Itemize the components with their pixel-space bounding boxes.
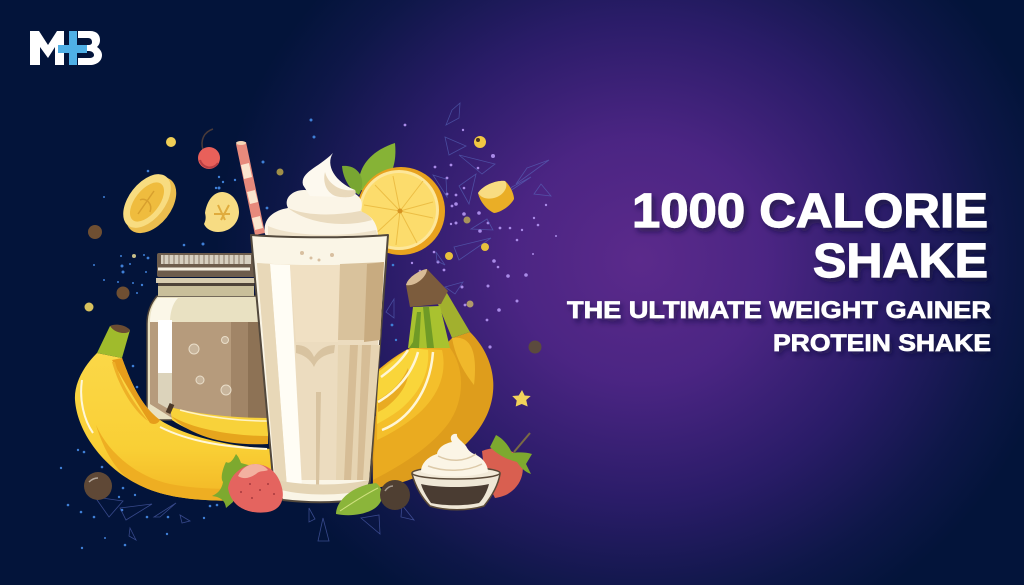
subtitle: THE ULTIMATE WEIGHT GAINER: [567, 297, 991, 324]
bananas right bunch: [372, 269, 493, 488]
banana slice middle: [204, 192, 239, 232]
banana piece right: [478, 181, 514, 213]
subtitle: [567, 297, 991, 357]
bubbles in jar: [189, 336, 231, 395]
heading: [632, 185, 988, 288]
heading: 1000 CALORIE: [632, 185, 988, 238]
strawberry right: [482, 433, 532, 498]
jar: [147, 253, 267, 420]
chocolate ball right: [380, 480, 410, 510]
whipped cream: [265, 153, 378, 240]
particles: constellation triangles: [95, 103, 551, 541]
leaf bottom: [336, 483, 382, 515]
banana slice left: [114, 165, 186, 243]
milkshake glass: [251, 235, 388, 502]
subtitle: PROTEIN SHAKE: [773, 330, 991, 357]
jar lid: [156, 253, 256, 296]
logo: M+B: [30, 31, 102, 65]
heading: SHAKE: [813, 235, 988, 288]
small floating dots and berries: [84, 136, 542, 406]
banana left front: [75, 325, 272, 501]
cream bowl: [412, 434, 500, 510]
banana left back: [168, 404, 268, 444]
cherry: [198, 129, 220, 169]
milkshake straw: [236, 141, 265, 235]
strawberry left: [212, 454, 283, 513]
lemon slice: [357, 167, 445, 255]
chocolate ball left: [84, 472, 112, 500]
particles: blue and violet dots: [60, 118, 397, 549]
mint leaves: [342, 143, 395, 195]
